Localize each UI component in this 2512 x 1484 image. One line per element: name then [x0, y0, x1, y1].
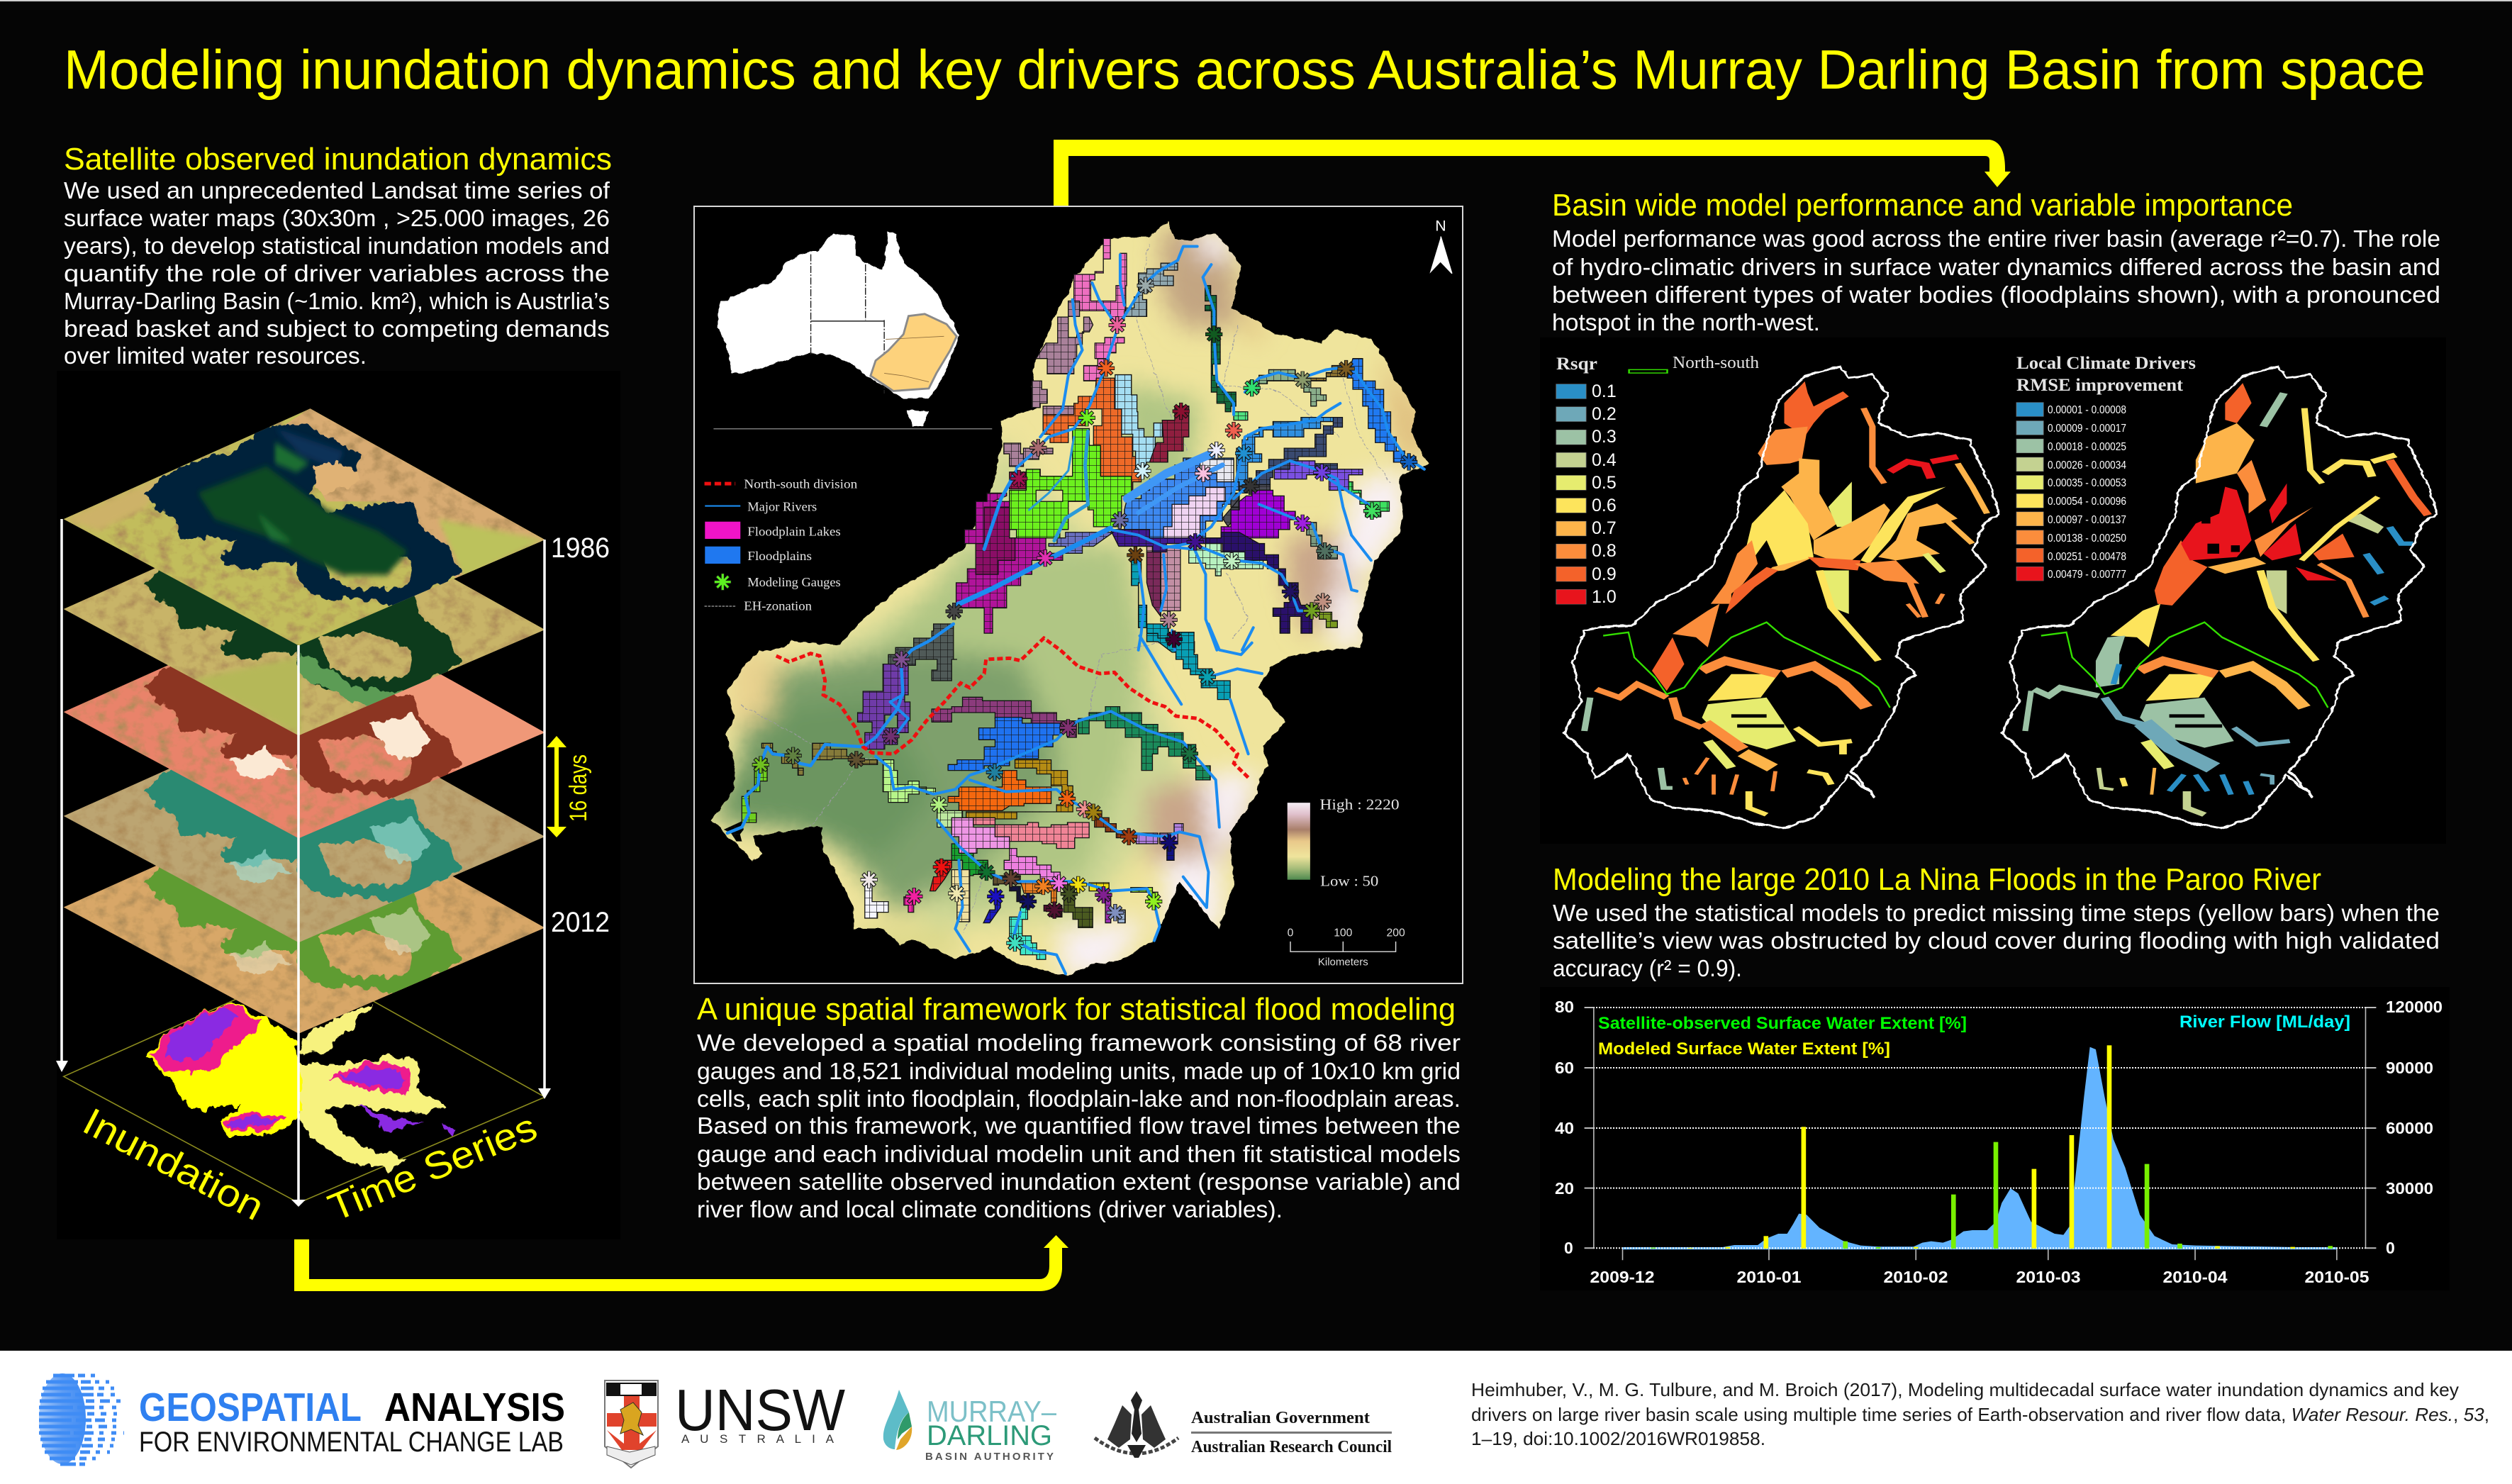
- right axis labels: [2386, 998, 2443, 1257]
- right axis labels: 120000: [2386, 998, 2443, 1016]
- citation: 1–19, doi:10.1002/2016WR019858.: [1471, 1428, 1765, 1449]
- legend title: local climate drivers: [2016, 354, 2196, 395]
- scale bar: Kilometers: [1318, 956, 1368, 968]
- text: for environmental change lab: FOR ENVIRONMENTAL CHANGE LAB: [139, 1427, 564, 1458]
- date labels: 2009-12: [1590, 1268, 1655, 1286]
- text: UNSW: UNSW: [675, 1377, 846, 1443]
- map legend: [705, 477, 857, 613]
- label: 1986: 1986: [551, 532, 610, 564]
- modeling units: floodplain grid patches: [724, 238, 1416, 959]
- heading: Basin wide model performance and variable importance: [1552, 188, 2293, 223]
- body text: We developed a spatial modeling framework consisting of 68 river: [697, 1030, 1461, 1056]
- date labels: 2010-05: [2304, 1268, 2369, 1286]
- left axis labels: 40: [1555, 1119, 1574, 1137]
- body text: cells, each split into floodplain, floodplain-lake and non-floodplain areas.: [697, 1086, 1461, 1112]
- legend text: Rsqr: 0.1: [1592, 381, 1617, 401]
- logo: Australian Government Australian Research Council: [1095, 1391, 1392, 1458]
- legend text: RMSE improvement: 0.00251 - 0.00478: [2048, 551, 2126, 563]
- time arrows: [56, 519, 551, 1207]
- footer band: [0, 1351, 2512, 1484]
- body text: surface water maps (30x30m , >25.000 images, 26: [64, 205, 610, 231]
- inset: Australia locator map: [713, 231, 992, 429]
- map legend: Modeling Gauges: [747, 575, 841, 589]
- map legend: Floodplain Lakes: [747, 525, 841, 539]
- panel: satellite observed inundation dynamics text: [64, 142, 612, 369]
- body text: hotspot in the north-west.: [1552, 309, 1820, 335]
- icon: water drop: [883, 1390, 912, 1450]
- right axis labels: 90000: [2386, 1059, 2433, 1077]
- major rivers: [727, 246, 1424, 973]
- legend text: Rsqr: 0.9: [1592, 564, 1617, 584]
- body text: We used an unprecedented Landsat time series of: [64, 177, 610, 203]
- legend title: local climate drivers: Local Climate Drivers: [2016, 354, 2196, 373]
- text: Darling: DARLING: [927, 1420, 1052, 1451]
- legend text: Rsqr: 0.4: [1592, 450, 1617, 470]
- basin outlines and north-south lines: [1564, 367, 2437, 828]
- arrow: map to model performance: [1054, 140, 2011, 206]
- legend title: local climate drivers: RMSE improvement: [2016, 376, 2184, 395]
- legend text: RMSE improvement: 0.00026 - 0.00034: [2048, 459, 2126, 472]
- chart legend: Satellite-observed Surface Water Extent [%]: [1598, 1014, 1967, 1033]
- heading: A unique spatial framework for statistical flood modeling: [697, 992, 1456, 1027]
- body text: satellite’s view was obstructed by cloud cover during flooding with high validated: [1553, 927, 2440, 954]
- body text: [64, 177, 610, 369]
- map: Rsqr: [1585, 381, 1987, 815]
- body text: gauges and 18,521 individual modeling units, made up of 10x10 km grid: [697, 1058, 1461, 1084]
- scale bar: 0: [1288, 927, 1294, 939]
- body text: Murray-Darling Basin (~1mio. km²), which is Austrlia’s: [64, 288, 610, 314]
- map legend: North-south division: [744, 477, 857, 491]
- text: Geospatial: GEOSPATIAL: [139, 1385, 362, 1430]
- body text: gauge and each individual modelin unit and then fit statistical models: [697, 1141, 1461, 1167]
- layer: green land scene: [64, 569, 543, 735]
- label: Inundation: Inundation: [76, 1100, 271, 1229]
- body text: We used the statistical models to predict missing time steps (yellow bars) when the: [1553, 900, 2440, 926]
- icon: dotted globe: [39, 1373, 125, 1464]
- left axis labels: 0: [1564, 1239, 1573, 1257]
- legend text: Rsqr: 0.8: [1592, 541, 1617, 561]
- legend text: Rsqr: [1556, 355, 1617, 607]
- icon: UNSW crest: [605, 1380, 658, 1468]
- panel: spatial framework map: [681, 199, 1475, 993]
- logo: Murray-Darling Basin Authority: [883, 1390, 1057, 1463]
- chart legend: [1598, 1012, 2350, 1059]
- layer: 1986 scene: [64, 408, 545, 645]
- panel: performance and importance maps: [1540, 337, 2446, 844]
- date labels: 2010-01: [1737, 1268, 1802, 1286]
- body text: [1552, 225, 2440, 335]
- modeling gauges: [752, 277, 1417, 952]
- layer: teal water scene: [64, 769, 543, 942]
- citation: drivers on large river basin scale using multiple time series of Earth-observation and river flow data, Water Resour. Res., 53,: [1471, 1404, 2489, 1425]
- panel: basin wide performance text: [1552, 188, 2440, 335]
- axis tick marks: [1585, 1008, 2376, 1248]
- scale bar: 100: [1334, 927, 1353, 939]
- map legend: Floodplains: [747, 549, 812, 563]
- panel: spatial framework text: [697, 992, 1461, 1222]
- legend text: RMSE improvement: 0.00018 - 0.00025: [2048, 441, 2126, 453]
- body text: Based on this framework, we quantified flow travel times between the: [697, 1112, 1461, 1139]
- text: Australian Research Council: Australian Research Council: [1191, 1438, 1392, 1456]
- date labels: 2010-03: [2016, 1268, 2080, 1286]
- legend text: Rsqr: 0.3: [1592, 427, 1617, 447]
- legend text: RMSE improvement: 0.00138 - 0.00250: [2048, 532, 2126, 545]
- chart legend: River Flow [ML/day]: [2179, 1012, 2350, 1032]
- north-south legend swatch: [1629, 369, 1668, 373]
- text: Murray: MURRAY–: [927, 1395, 1057, 1428]
- observed bars: [1651, 1142, 2333, 1249]
- image stack layers: [64, 408, 545, 1203]
- icon: coat of arms: [1095, 1391, 1178, 1458]
- legend text: RMSE improvement: 0.00097 - 0.00137: [2048, 514, 2126, 526]
- axes and ticks: [1594, 1008, 2365, 1260]
- map legend: Major Rivers: [747, 500, 817, 514]
- legend text: Rsqr: 1.0: [1592, 587, 1617, 607]
- map: local climate drivers: [2025, 383, 2428, 815]
- body text: years), to develop statistical inundation models and: [64, 233, 610, 259]
- body text: [697, 1030, 1461, 1222]
- layer: red false-colour scene: [64, 665, 543, 838]
- south basin patches: [724, 624, 1230, 959]
- body text: between satellite observed inundation extent (response variable) and: [697, 1168, 1461, 1195]
- logo: UNSW: [605, 1377, 846, 1468]
- scale bar: 200: [1386, 927, 1405, 939]
- chart legend: Modeled Surface Water Extent [%]: [1598, 1039, 1890, 1059]
- legend swatches: RMSE improvement: [2016, 403, 2043, 581]
- flow area: [1623, 1047, 2337, 1249]
- text: Analysis: ANALYSIS: [384, 1385, 565, 1430]
- body text: of hydro-climatic drivers in surface water dynamics differed across the basin and: [1552, 254, 2440, 280]
- divider line: [1191, 1432, 1392, 1434]
- elevation legend: Low : 50: [1320, 872, 1378, 889]
- scale bar: [1288, 927, 1405, 968]
- map legend: EH-zonation: [744, 599, 812, 613]
- legend text: Rsqr: 0.5: [1592, 473, 1617, 493]
- north arrow: N: [1435, 218, 1446, 235]
- legend text: RMSE improvement: 0.00009 - 0.00017: [2048, 423, 2126, 435]
- left axis labels: [1555, 998, 1574, 1257]
- body text: river flow and local climate conditions (driver variables).: [697, 1196, 1283, 1222]
- date labels: 2010-04: [2162, 1268, 2228, 1286]
- label: 16 days: 16 days: [565, 754, 592, 822]
- elevation legend: High : 2220: [1319, 796, 1400, 813]
- title: Modeling inundation dynamics and key drivers across Australia’s Murray Darling Basin from space: [64, 38, 2426, 101]
- text: Basin Authority: BASIN AUTHORITY: [925, 1451, 1054, 1463]
- north basin patches: [956, 238, 1416, 652]
- left axis labels: 60: [1555, 1059, 1574, 1077]
- layer: 2012 scene: [64, 866, 543, 1034]
- grid lines: [1593, 1008, 2366, 1248]
- body text: Model performance was good across the entire river basin (average r²=0.7). The role: [1552, 225, 2440, 252]
- legend text: RMSE improvement: 0.00035 - 0.00053: [2048, 477, 2126, 489]
- panel: satellite image stack: [56, 371, 620, 1239]
- body text: between different types of water bodies (floodplains shown), with a pronounced: [1552, 281, 2440, 308]
- legend text: RMSE improvement: 0.00001 - 0.00008: [2048, 404, 2126, 416]
- legend text: Rsqr: Rsqr: [1556, 355, 1597, 374]
- citation: [1471, 1379, 2489, 1449]
- panel: La Nina floods text: [1553, 862, 2440, 981]
- text: Australia: A U S T R A L I A: [681, 1432, 834, 1446]
- legend text: Rsqr: 0.2: [1592, 404, 1617, 424]
- date labels: [1590, 1268, 2369, 1286]
- heading: Satellite observed inundation dynamics: [64, 142, 612, 177]
- citation: Heimhuber, V., M. G. Tulbure, and M. Broich (2017), Modeling multidecadal surface water inundation dynamics and key: [1471, 1379, 2459, 1400]
- label: Time Series: Time Series: [323, 1105, 543, 1229]
- legend text: RMSE improvement: 0.00054 - 0.00096: [2048, 496, 2126, 508]
- right axis labels: 30000: [2386, 1179, 2433, 1198]
- arrow: 16 days double-headed: [547, 736, 566, 837]
- right axis labels: 0: [2386, 1239, 2395, 1257]
- label: north-south: North-south: [1673, 354, 1759, 372]
- legend swatches: Rsqr: [1556, 384, 1586, 604]
- arrow: satellite stack to framework: [294, 1235, 1068, 1291]
- top edge line: [0, 0, 2512, 1]
- elevation legend: [1288, 796, 1400, 889]
- body text: accuracy (r² = 0.9).: [1553, 955, 1742, 981]
- north arrow: [1429, 218, 1452, 274]
- heading: Modeling the large 2010 La Nina Floods in the Paroo River: [1553, 862, 2321, 897]
- legend text: Rsqr: 0.7: [1592, 518, 1617, 538]
- label: 2012: 2012: [551, 907, 610, 938]
- north-south division line: [776, 638, 1249, 778]
- text: Australian Government: Australian Government: [1191, 1409, 1370, 1427]
- legend text: Rsqr: 0.6: [1592, 496, 1617, 515]
- modeled bars: [1688, 1045, 2295, 1249]
- body text: quantify the role of driver variables across the: [64, 260, 610, 286]
- left axis labels: 20: [1555, 1179, 1574, 1198]
- layer: inundation frequency map: [64, 966, 545, 1203]
- basin elevation terrain: [701, 213, 1440, 983]
- logo: Geospatial Analysis lab: [39, 1373, 565, 1464]
- date labels: 2010-02: [1883, 1268, 1948, 1286]
- legend text: RMSE improvement: 0.00479 - 0.00777: [2048, 569, 2126, 581]
- left axis labels: 80: [1555, 998, 1574, 1016]
- panel: flood time series chart: [1540, 987, 2450, 1290]
- body text: bread basket and subject to competing demands: [64, 316, 610, 342]
- legend text: RMSE improvement: [2048, 404, 2126, 581]
- body text: over limited water resources.: [64, 342, 367, 369]
- body text: [1553, 900, 2440, 981]
- right axis labels: 60000: [2386, 1119, 2433, 1137]
